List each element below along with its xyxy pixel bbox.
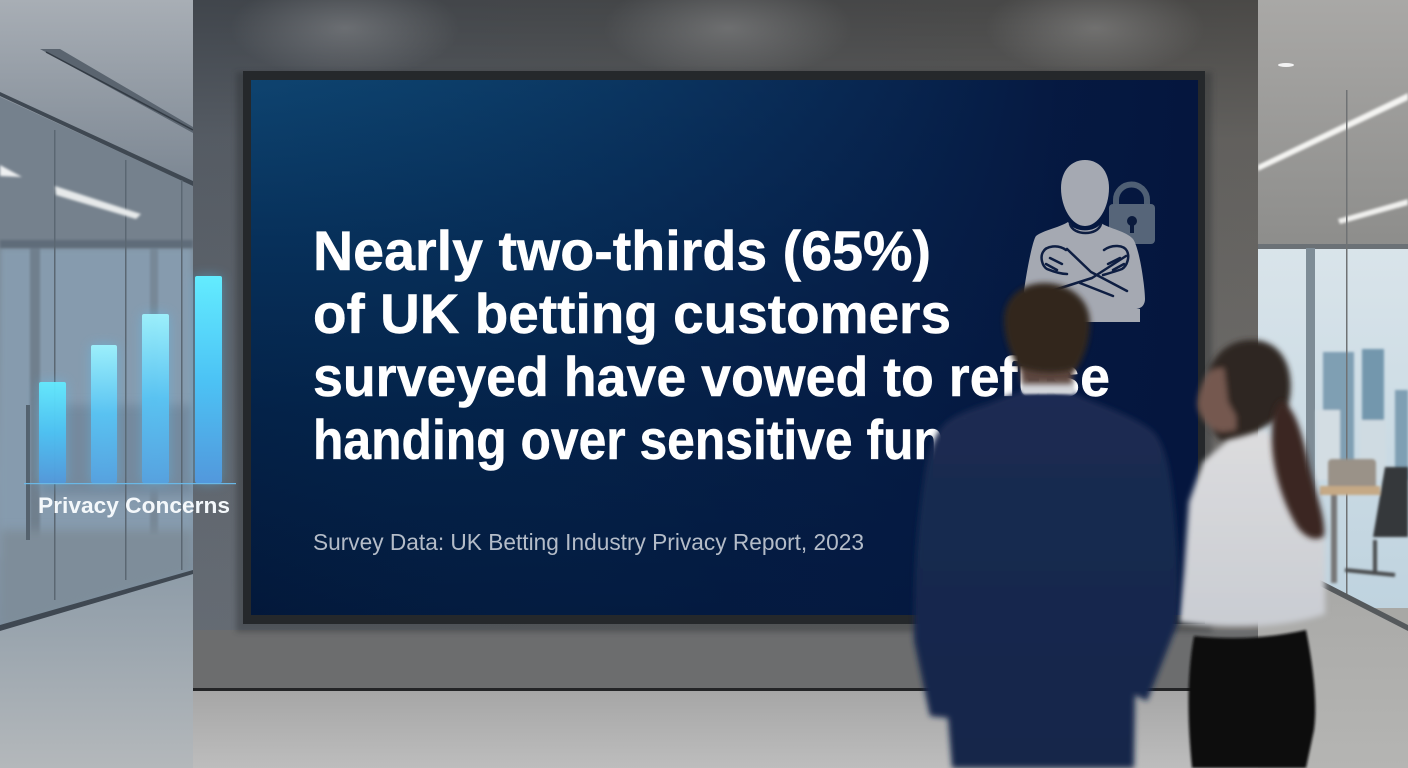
icon: person with crossed arms: [1024, 160, 1145, 322]
man's hair: [1004, 283, 1090, 373]
headline: surveyed have vowed to refuse: [313, 345, 1110, 408]
bar 2: [91, 345, 117, 483]
man's suit: [914, 389, 1178, 768]
right office background: [1258, 0, 1408, 768]
wall: [193, 0, 1258, 690]
bar glow: [39, 276, 222, 483]
floor: [193, 688, 1258, 768]
headline: handing over sensitive funds: [313, 408, 1002, 471]
screen shadow: [236, 72, 1212, 632]
woman's skirt: [1188, 630, 1315, 768]
bar 4: [195, 276, 222, 483]
woman's ponytail: [1272, 400, 1324, 539]
screen frame: [243, 71, 1205, 624]
woman's blouse: [1179, 430, 1325, 627]
foreground man: [914, 283, 1178, 768]
bar chart: privacy concerns: [24, 276, 236, 518]
icon: padlock: [1109, 184, 1155, 244]
man's neck: [1018, 350, 1076, 384]
man's collar: [1022, 380, 1074, 394]
display screen: [236, 71, 1212, 632]
foreground woman: [1179, 340, 1325, 768]
headline: of UK betting customers: [313, 282, 951, 345]
chart label: Privacy Concerns: [38, 493, 230, 518]
headline: Nearly two-thirds (65%): [313, 219, 931, 282]
source line: Survey Data: UK Betting Industry Privacy Report, 2023: [313, 529, 864, 555]
bar 1: [39, 382, 66, 483]
left office background: [0, 0, 193, 768]
woman's head: [1198, 340, 1291, 444]
screen panel: [251, 80, 1198, 615]
bar 3: [142, 314, 169, 483]
